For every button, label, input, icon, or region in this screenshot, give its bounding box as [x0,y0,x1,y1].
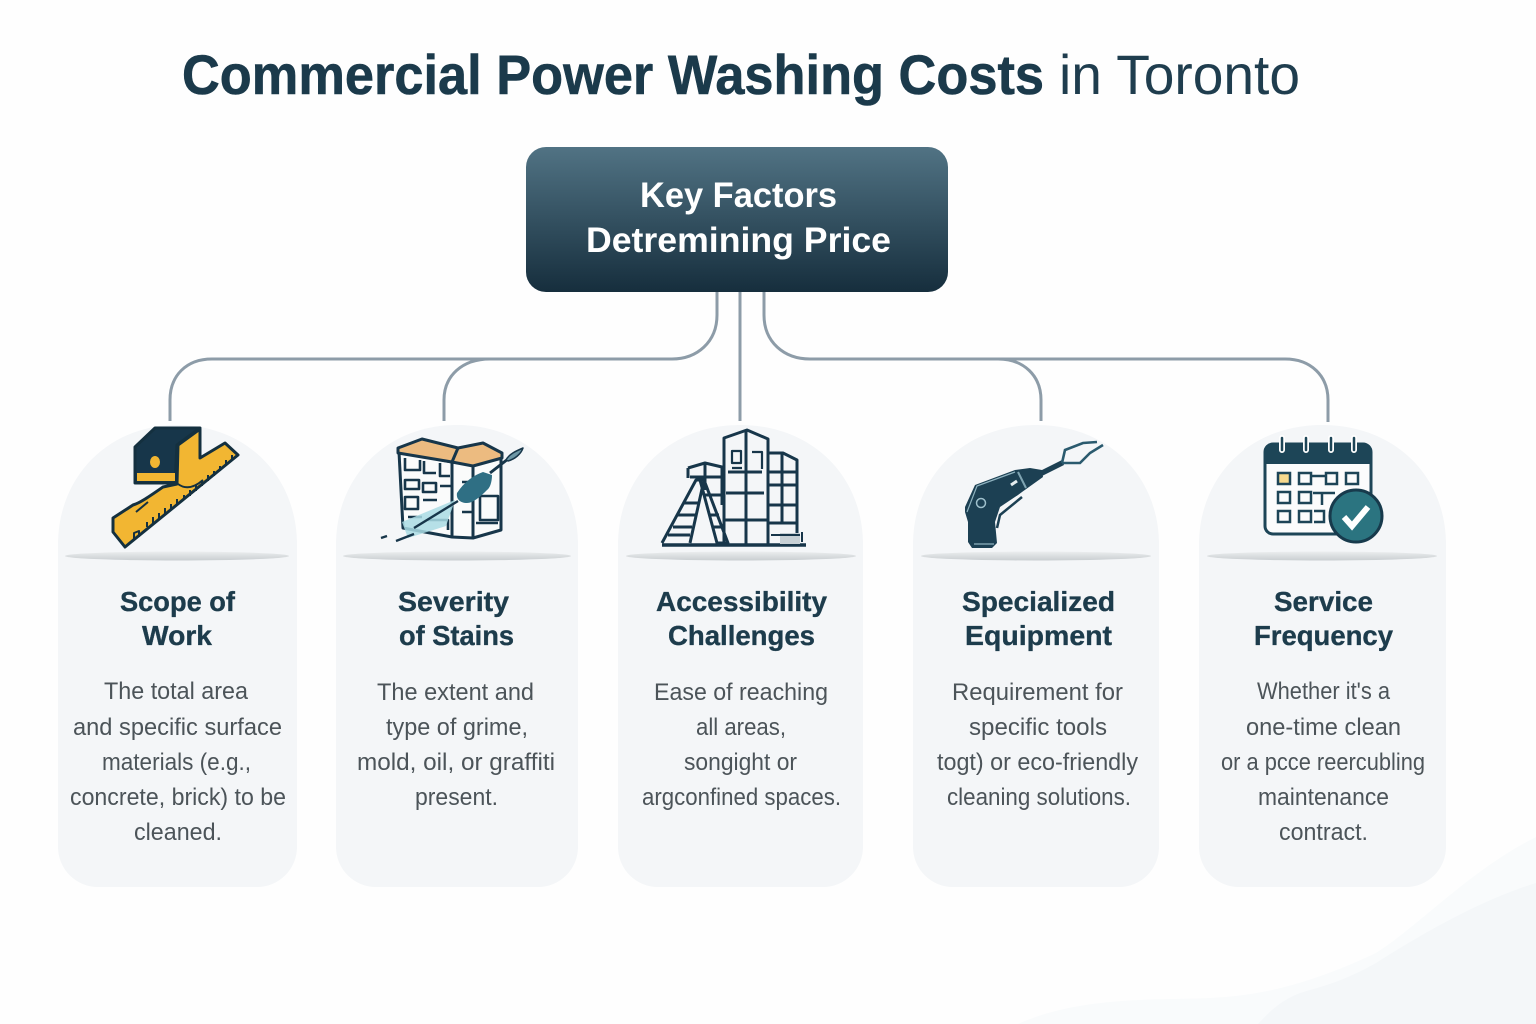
icon: pressure washer gun [965,442,1103,548]
description: all areas, [696,714,786,741]
description [357,679,555,811]
heading: Work [142,620,212,651]
description [70,678,286,846]
heading: of Stains [399,620,514,651]
description: present. [415,784,498,811]
description: and specific surface [73,714,282,741]
description: specific tools [969,714,1107,741]
description: materials (e.g., [102,749,251,776]
panel: service frequency [1199,425,1446,887]
description [642,679,841,811]
icon: box and ruler [113,428,238,547]
description: The extent and [377,679,534,706]
heading: Scope of [120,586,236,617]
panel: scope of work [58,425,297,887]
header box: key factors: Key Factors [640,176,837,215]
header box: key factors [526,147,948,292]
description: argconfined spaces. [642,784,841,811]
heading [962,586,1115,651]
description: type of grime, [386,714,528,741]
description: Requirement for [952,679,1123,706]
panel: specialized equipment [913,425,1159,887]
description: or a pcce reercubling [1221,749,1425,776]
heading [1254,586,1393,651]
description: Ease of reaching [654,679,828,706]
heading: Service [1274,586,1373,617]
icon: buildings and ladder [662,430,806,545]
heading: Frequency [1254,620,1393,651]
heading: Severity [398,586,509,617]
description: contract. [1279,819,1368,846]
heading: Accessibility [656,586,827,617]
icon: calendar with check [1265,438,1382,542]
description [937,679,1138,811]
description: concrete, brick) to be [70,784,286,811]
heading [120,586,236,651]
header box: key factors: Detremining Price [586,221,891,260]
description: songight or [684,749,797,776]
description: one-time clean [1246,714,1401,741]
heading: Equipment [965,620,1112,651]
description: maintenance [1258,784,1389,811]
connector lines [170,292,1328,422]
panel: severity of stains [336,425,578,887]
description [1221,678,1425,846]
description: Whether it's a [1257,678,1391,705]
heading [656,586,827,651]
panel: accessibility challenges [618,425,863,887]
description: cleaned. [134,819,222,846]
description: The total area [104,678,249,705]
title: Commercial Power Washing Costs [182,43,1044,106]
description: togt) or eco-friendly [937,749,1138,776]
icon: stained building and nozzle [381,439,523,541]
description: cleaning solutions. [947,784,1131,811]
heading: Specialized [962,586,1115,617]
title: in Toronto [1059,43,1300,106]
heading [398,586,514,651]
heading: Challenges [668,620,815,651]
description: mold, oil, or graffiti [357,749,555,776]
